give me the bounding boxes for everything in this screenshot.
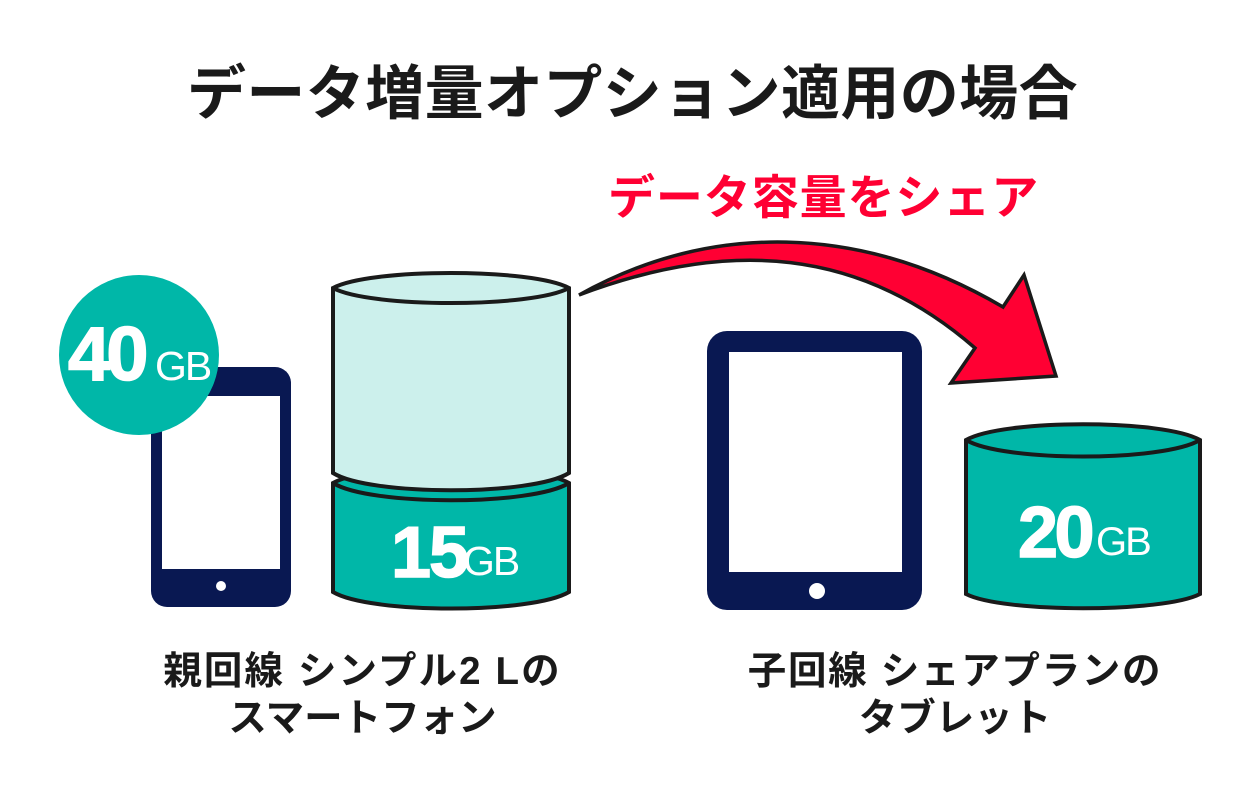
- label: 20GB: 20: [1018, 493, 1093, 573]
- caption: parent line: 親回線 シンプル2 Lの: [163, 650, 562, 693]
- label: 15GB: GB: [463, 538, 519, 584]
- label: 20GB: [1018, 493, 1150, 573]
- icon: smartphone: [151, 367, 291, 607]
- heading: share data capacity: データ容量をシェア: [608, 171, 1039, 224]
- caption: child line: 子回線 シェアプランの: [748, 650, 1162, 693]
- title: データ増量オプション適用の場合: [187, 61, 1078, 127]
- arrow: data share: [579, 242, 1056, 383]
- badge: 40GB: [59, 275, 219, 435]
- caption: parent line: [163, 650, 562, 740]
- cylinder: parent line 15GB used: [333, 273, 569, 608]
- caption: parent line: スマートフォン: [228, 697, 497, 740]
- icon: tablet: [707, 331, 922, 610]
- label: 20GB: GB: [1096, 520, 1150, 564]
- caption: child line: [748, 650, 1162, 740]
- label: 15GB: 15: [391, 513, 468, 593]
- cylinder: remaining capacity: [333, 273, 569, 490]
- cylinder: child line 20GB: [966, 424, 1200, 608]
- label: 15GB: [391, 513, 519, 593]
- badge: 40GB: 40: [68, 312, 146, 397]
- badge: 40GB: GB: [155, 343, 211, 389]
- caption: child line: タブレット: [859, 696, 1051, 740]
